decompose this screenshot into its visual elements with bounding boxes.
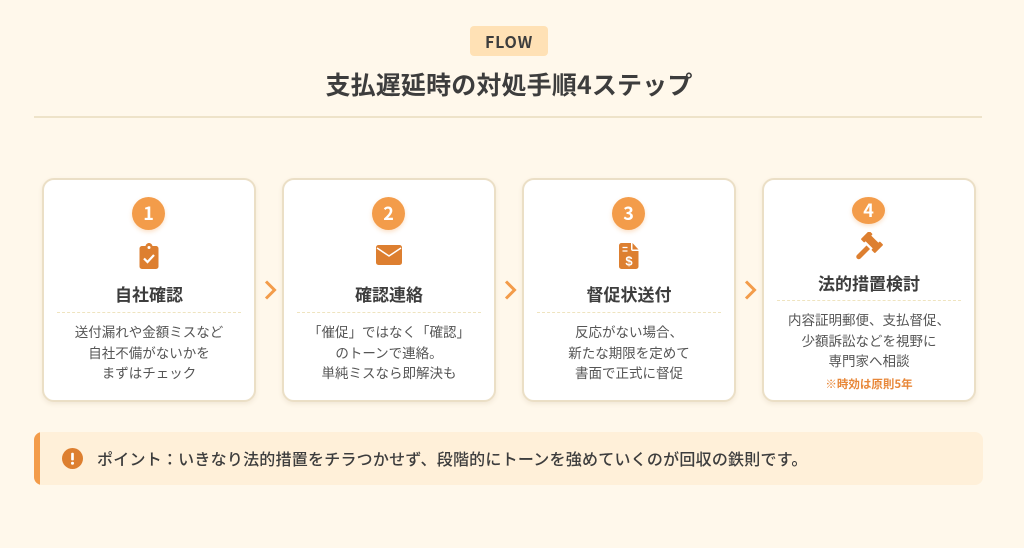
step heading: 確認連絡 <box>355 281 423 306</box>
step description <box>75 321 223 382</box>
step heading: 自社確認 <box>115 281 183 306</box>
panel: step 4 <box>762 178 976 402</box>
step number 4 <box>852 197 885 224</box>
badge: FLOW: FLOW <box>485 29 533 53</box>
icon: clipboard check <box>140 243 158 269</box>
step description: 内容証明郵便、支払督促、 <box>788 309 950 329</box>
step description: 単純ミスなら即解決も <box>322 362 456 382</box>
step heading: 督促状送付 <box>586 281 672 306</box>
icon: envelope <box>376 245 402 265</box>
step number 4: 4 <box>863 197 874 223</box>
arrow <box>745 280 756 300</box>
callout accent bar <box>34 432 40 485</box>
arrow <box>505 280 516 300</box>
step number 1 <box>132 197 165 230</box>
step description: 自社不備がないかを <box>88 342 210 362</box>
step description <box>788 309 950 370</box>
title: 支払遅延時の対処手順4ステップ <box>325 66 692 102</box>
step description <box>568 321 690 382</box>
panel: step 2 <box>282 178 496 402</box>
step description: 反応がない場合、 <box>575 321 683 341</box>
step description: 新たな期限を定めて <box>568 342 690 362</box>
step description: 少額訴訟などを視野に <box>802 330 936 350</box>
panel: step 3 <box>522 178 736 402</box>
badge: FLOW <box>470 26 548 56</box>
step number 2 <box>372 197 405 230</box>
step number 2: 2 <box>383 200 394 226</box>
title underline <box>34 116 982 118</box>
step description: 「催促」ではなく「確認」 <box>308 321 470 341</box>
callout text: ポイント：いきなり法的措置をチラつかせず、段階的にトーンを強めていくのが回収の鉄則です。 <box>97 446 808 470</box>
note: statute of limitations: ※時効は原則5年 <box>825 376 913 392</box>
step number 3: 3 <box>623 200 634 226</box>
step heading: 法的措置検討 <box>818 270 920 295</box>
icon: invoice: $ <box>625 254 633 268</box>
step description: 送付漏れや金額ミスなど <box>75 321 223 341</box>
step description <box>308 321 470 382</box>
step description: 専門家へ相談 <box>828 350 910 370</box>
step description: のトーンで連絡。 <box>335 342 443 362</box>
icon: exclamation <box>62 448 83 469</box>
icon: gavel <box>856 232 883 260</box>
icon: invoice <box>619 243 638 269</box>
callout: point <box>34 432 983 485</box>
step description: 書面で正式に督促 <box>575 362 683 382</box>
panel: step 1 <box>42 178 256 402</box>
step number 3 <box>612 197 645 230</box>
step number 1: 1 <box>143 200 154 226</box>
arrow <box>265 280 276 300</box>
step description: まずはチェック <box>102 362 196 382</box>
